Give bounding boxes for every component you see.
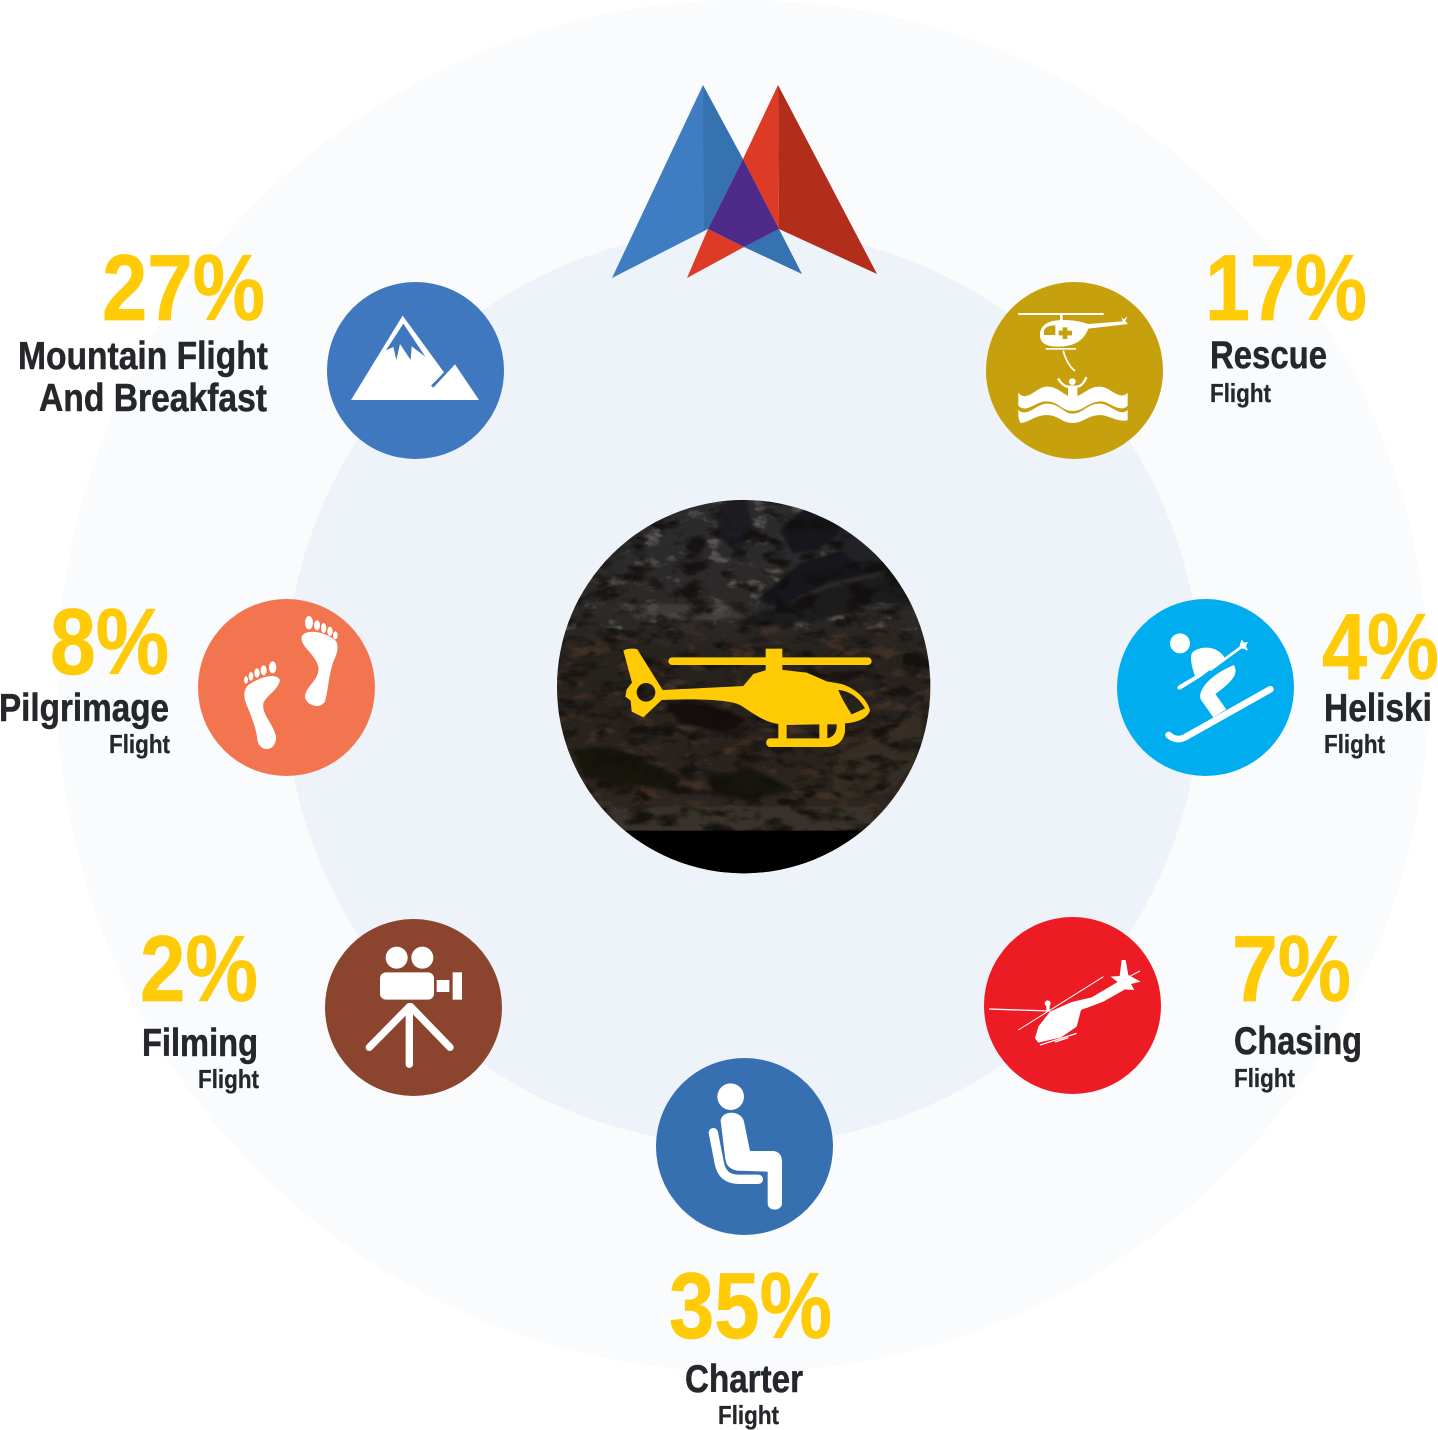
segment: Chasing Flight [984,916,1362,1094]
icon: yellow helicopter [623,649,872,747]
icon: banking helicopter [984,917,1161,1094]
percentage 27%: 27% [102,235,265,340]
label: Mountain Flight And Breakfast: And Breakfast [39,377,267,420]
segment: Filming Flight [140,916,502,1096]
label: Mountain Flight And Breakfast: Mountain Flight [18,335,268,378]
segment: Rescue Flight [986,235,1367,459]
icon: helicopter water rescue [986,282,1163,459]
percentage 7%: 7% [1232,916,1351,1021]
segment: Pilgrimage Flight [0,589,375,776]
label: Flight: Flight [198,1064,259,1094]
segment: Mountain Flight And Breakfast [18,235,504,459]
icon: film camera on tripod [325,919,502,1096]
label: Flight: Flight [1324,729,1385,759]
percentage 2%: 2% [140,916,258,1021]
label: Flight: Flight [1210,378,1271,408]
percentage 35%: 35% [669,1253,832,1358]
label: Charter: Charter [685,1358,803,1401]
label: Flight: Flight [109,729,170,759]
label: Flight: Flight [1234,1063,1295,1093]
icon: footprints [198,599,375,776]
label: Mountain Flight And Breakfast [18,335,268,420]
icon: mountain [327,282,504,459]
segment: Charter Flight [656,1058,833,1430]
label: Filming: Filming [142,1022,258,1065]
center photo with helicopter [557,500,931,874]
icon: skier [1117,599,1294,776]
percentage 8%: 8% [50,589,169,694]
label: Pilgrimage: Pilgrimage [0,687,169,730]
background: inner circle [285,229,1201,1145]
label: Flight: Flight [718,1400,779,1430]
icon: seated passenger [656,1058,833,1235]
segment: Heliski Flight [1117,594,1438,776]
label: Chasing: Chasing [1234,1020,1362,1063]
percentage 17%: 17% [1205,235,1367,340]
logo [612,85,877,278]
label: Rescue: Rescue [1210,334,1327,377]
